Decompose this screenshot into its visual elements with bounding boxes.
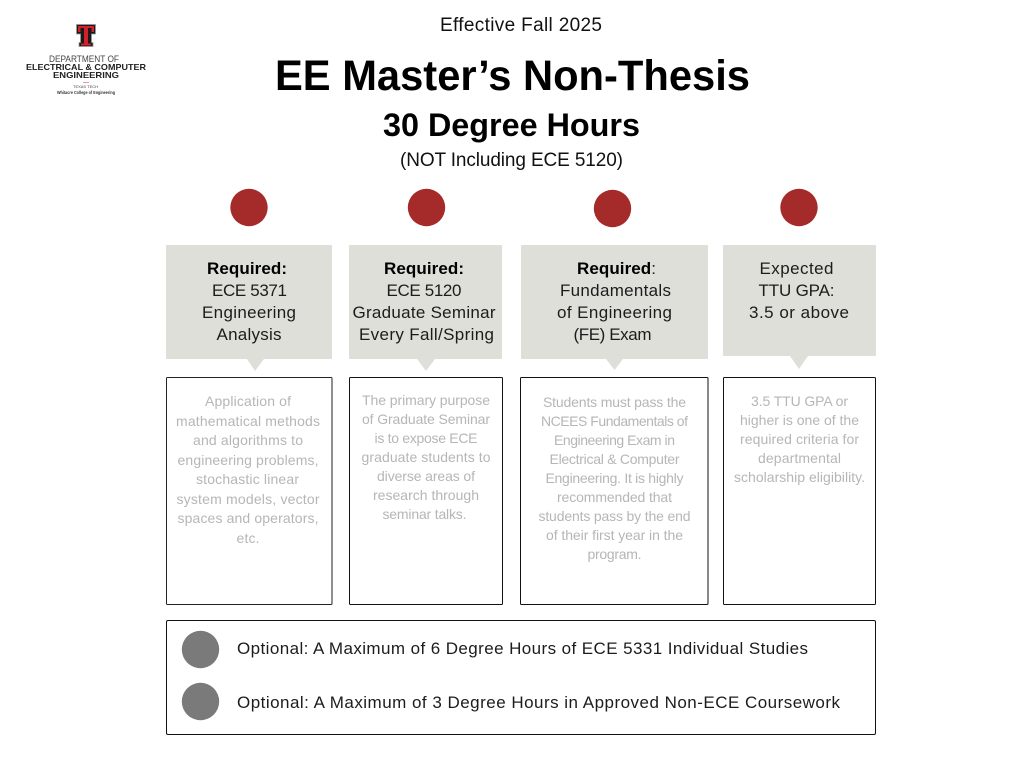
description box: FE exam: of their first year in the bbox=[546, 527, 683, 543]
header box: expected GPA: 3.5 or above bbox=[749, 303, 849, 322]
description box: GPA bbox=[724, 378, 876, 604]
logo: Texas Tech ECE department: ENGINEERING bbox=[53, 70, 119, 80]
description box: FE exam: program. bbox=[588, 546, 642, 562]
header box: Required ECE 5371 bbox=[166, 245, 332, 371]
description box: FE exam: recommended that bbox=[557, 489, 672, 505]
column: FE exam bbox=[520, 190, 708, 605]
icon: red dot bbox=[594, 190, 631, 227]
description box: engineering analysis: system models, vector bbox=[176, 491, 320, 507]
description box: FE exam: Engineering Exam in bbox=[554, 432, 675, 448]
description box: GPA: required criteria for bbox=[740, 431, 859, 447]
description box: graduate seminar: of Graduate Seminar bbox=[362, 411, 490, 427]
description box: GPA: departmental bbox=[758, 450, 841, 466]
header box: Required ECE 5120: ECE 5120 bbox=[386, 281, 462, 300]
panel: optional coursework bbox=[166, 620, 876, 734]
logo: Texas Tech ECE department: DEPARTMENT OF bbox=[49, 54, 119, 64]
description box: engineering analysis: and algorithms to bbox=[193, 432, 303, 448]
description box: engineering analysis: mathematical methods bbox=[176, 413, 320, 429]
header box: Required FE exam: Required: bbox=[577, 259, 656, 278]
header box: Required ECE 5371: Required: bbox=[207, 259, 287, 278]
description box: FE exam bbox=[520, 378, 708, 604]
logo: Texas Tech ECE department: TEXAS TECH bbox=[73, 84, 98, 89]
description box: graduate seminar: diverse areas of bbox=[377, 468, 475, 484]
description box: engineering analysis: spaces and operators, bbox=[178, 510, 318, 526]
description box: FE exam: Engineering. It is highly bbox=[546, 470, 684, 486]
description box: graduate seminar: The primary purpose bbox=[362, 392, 490, 408]
description box: FE exam: Electrical & Computer bbox=[550, 451, 680, 467]
description box: GPA: 3.5 TTU GPA or bbox=[751, 393, 848, 409]
header box: Required ECE 5371: Engineering bbox=[202, 303, 296, 322]
header box: Required ECE 5120: Every Fall/Spring bbox=[359, 325, 494, 344]
header box: Required FE exam: Fundamentals bbox=[560, 281, 671, 300]
header box: Required ECE 5120: Required: bbox=[384, 259, 464, 278]
description box: graduate seminar: graduate students to bbox=[362, 449, 491, 465]
header box: Required FE exam: of Engineering bbox=[557, 303, 672, 322]
description box: engineering analysis bbox=[166, 378, 332, 604]
column: TTU GPA bbox=[723, 189, 876, 605]
description box: graduate seminar bbox=[350, 378, 502, 604]
description box: engineering analysis: engineering problems, bbox=[178, 452, 318, 468]
description box: FE exam: NCEES Fundamentals of bbox=[541, 413, 688, 429]
description box: graduate seminar: seminar talks. bbox=[382, 506, 466, 522]
icon: red dot bbox=[408, 189, 445, 226]
optional item: ECE 5331: Optional: A Maximum of 6 Degree Hours of ECE 5331 Individual Studies bbox=[237, 639, 808, 658]
logo: Texas Tech ECE department: ELECTRICAL & COMPUTER bbox=[26, 62, 146, 72]
column: ECE 5120 bbox=[349, 189, 502, 605]
column: ECE 5371 bbox=[166, 189, 332, 605]
description box: FE exam: students pass by the end bbox=[538, 508, 690, 524]
description box: engineering analysis: etc. bbox=[236, 530, 260, 546]
logo: Texas Tech ECE department bbox=[26, 24, 146, 95]
effective date: Effective Fall 2025 bbox=[440, 15, 602, 36]
description box: engineering analysis: Application of bbox=[205, 393, 291, 409]
header box: expected GPA bbox=[723, 245, 876, 369]
optional item: non-ECE coursework: Optional: A Maximum of 3 Degree Hours in Approved Non-ECE Coursework bbox=[237, 693, 840, 712]
description box: GPA: scholarship eligibility. bbox=[734, 469, 865, 485]
description box: engineering analysis: stochastic linear bbox=[196, 471, 299, 487]
header box: Required ECE 5371: Analysis bbox=[216, 325, 282, 344]
logo: Texas Tech ECE department: Whitacre College of Engineering bbox=[57, 90, 115, 95]
icon: grey dot bbox=[182, 683, 219, 720]
description box: FE exam: Students must pass the bbox=[543, 394, 686, 410]
description box: GPA: higher is one of the bbox=[740, 412, 859, 428]
header box: expected GPA: TTU GPA: bbox=[758, 281, 834, 300]
icon: double T bbox=[76, 24, 96, 46]
note: not including ECE 5120: (NOT Including ECE 5120) bbox=[400, 150, 623, 171]
header box: Required ECE 5371: ECE 5371 bbox=[212, 281, 287, 300]
subtitle: degree hours: 30 Degree Hours bbox=[383, 107, 640, 143]
header box: Required ECE 5120: Graduate Seminar bbox=[352, 303, 496, 322]
header box: Required ECE 5120 bbox=[349, 245, 502, 371]
icon: red dot bbox=[780, 189, 818, 226]
header box: Required FE exam: (FE) Exam bbox=[574, 325, 652, 344]
header box: expected GPA: Expected bbox=[760, 259, 834, 278]
description box: graduate seminar: is to expose ECE bbox=[374, 430, 478, 446]
icon: red dot bbox=[230, 189, 268, 226]
title: EE Master’s Non-Thesis bbox=[275, 52, 750, 100]
header box: Required FE exam bbox=[521, 245, 708, 370]
icon: grey dot bbox=[182, 631, 219, 668]
description box: graduate seminar: research through bbox=[373, 487, 479, 503]
